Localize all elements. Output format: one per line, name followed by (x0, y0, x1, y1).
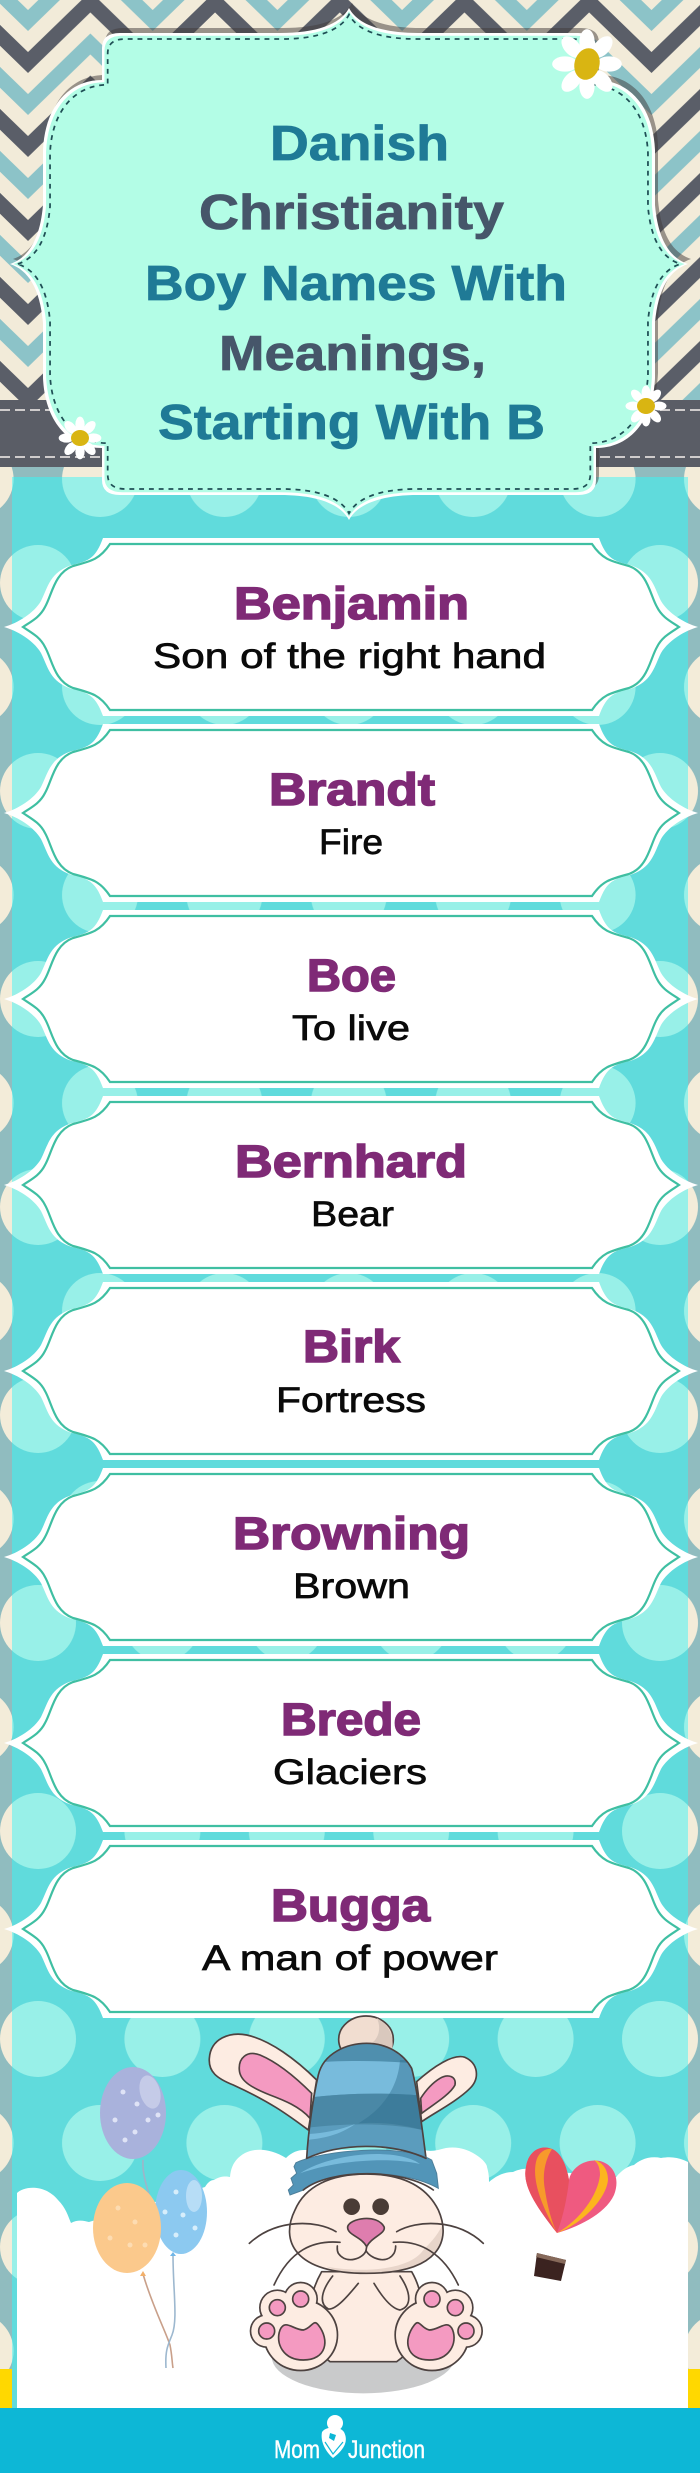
panel: Browning (4, 1468, 698, 1646)
left foot (251, 2283, 337, 2370)
panel: Brede (4, 1654, 698, 1832)
title: Starting With B (158, 396, 545, 450)
panel: Bugga (4, 1840, 698, 2018)
pom pom (339, 2016, 393, 2063)
icon: balloon basket (534, 2253, 566, 2281)
nose (348, 2218, 384, 2247)
panel: Boe (4, 910, 698, 1088)
head (290, 2174, 444, 2273)
panel: Bugga: A man of power (202, 1939, 498, 1978)
panel: Brandt: Brandt (269, 764, 435, 815)
arms (322, 2276, 409, 2310)
yellow strip accents (0, 2369, 700, 2408)
icon: daisy bottom right (626, 386, 666, 426)
icon: balloons (93, 2067, 207, 2368)
panel: Birk: Fortress (276, 1381, 426, 1420)
logo: MomJunction (274, 2415, 425, 2464)
title plaque (10, 3, 691, 520)
logo: MomJunction: Junction (348, 2436, 425, 2464)
panel: Boe: To live (292, 1009, 410, 1048)
logo: mother and child mark (322, 2415, 346, 2458)
panel: Bernhard: Bernhard (235, 1136, 467, 1187)
panel: Benjamin: Son of the right hand (153, 637, 546, 676)
title: Danish (270, 117, 449, 171)
panel: Brede: Brede (281, 1694, 421, 1745)
panel: Benjamin: Benjamin (234, 578, 469, 629)
panel: Brandt: Fire (319, 823, 383, 862)
stitched grey ribbon (0, 400, 700, 467)
panel: Benjamin (4, 538, 698, 716)
icon: daisy top right (552, 29, 622, 99)
teal polka dot background (12, 477, 688, 2408)
title (145, 117, 567, 450)
body (309, 2272, 422, 2362)
chevron header background (0, 0, 700, 401)
title: Meanings, (219, 327, 486, 381)
right ear (417, 2057, 476, 2122)
panel: Bernhard: Bear (311, 1195, 394, 1234)
polka dot side strips background (0, 467, 700, 2408)
left ear (209, 2034, 317, 2130)
title: Boy Names With (145, 257, 567, 311)
footer bar (0, 2408, 700, 2473)
title: Christianity (199, 186, 504, 240)
eyes (343, 2198, 389, 2215)
white clouds (17, 2147, 688, 2408)
logo: MomJunction: Mom (274, 2436, 320, 2464)
panel: Browning: Browning (233, 1508, 470, 1559)
panel: Bernhard (4, 1096, 698, 1274)
icon: heart hot air balloon (525, 2148, 616, 2233)
panel: Birk (4, 1282, 698, 1460)
panel: Browning: Brown (293, 1567, 410, 1606)
panel: Bugga: Bugga (271, 1880, 431, 1931)
panel: Birk: Birk (303, 1321, 401, 1372)
icon: bunny wearing a striped hat (209, 2016, 483, 2393)
mouth and whiskers (249, 2223, 483, 2285)
hat (288, 2040, 438, 2195)
panel: Brandt (4, 724, 698, 902)
right foot (396, 2283, 481, 2370)
icon: daisy bottom left (59, 417, 101, 459)
panel: Boe: Boe (307, 950, 396, 1001)
panel: Brede: Glaciers (273, 1753, 427, 1792)
